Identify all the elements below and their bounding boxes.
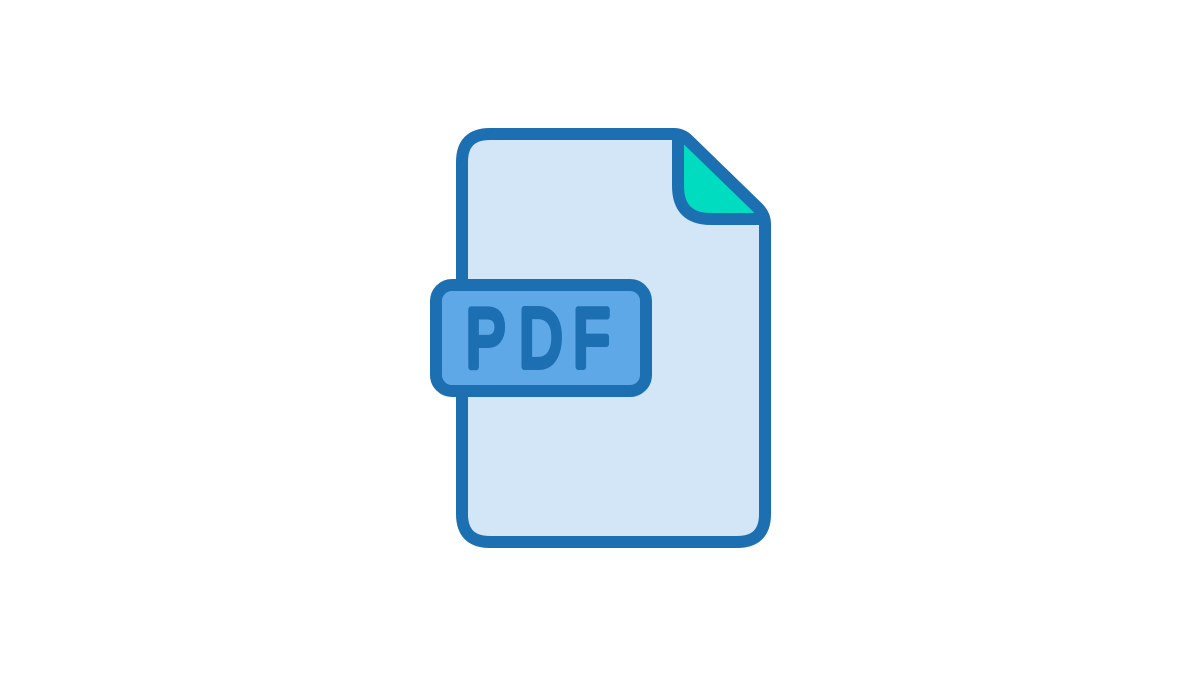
folded corner [678, 136, 763, 219]
label text: F [573, 293, 610, 385]
PDF label [436, 285, 646, 391]
label text: D [519, 293, 562, 385]
label text: P [466, 293, 506, 385]
label badge [436, 285, 646, 391]
document page [462, 134, 765, 542]
